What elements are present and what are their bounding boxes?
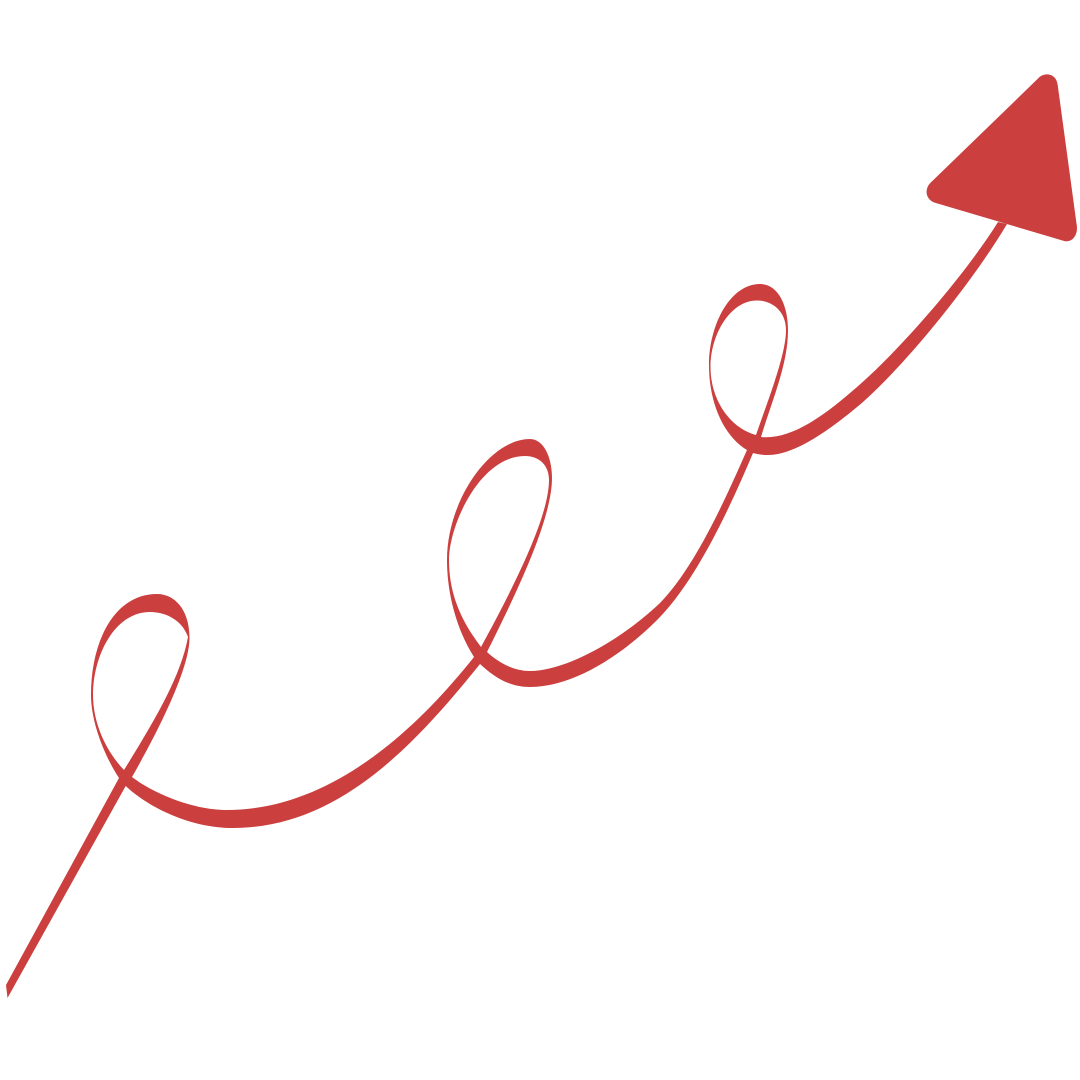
- arrowhead: rounded triangle: [927, 74, 1077, 241]
- arrow shaft: ribbon with three loops: [6, 222, 1007, 998]
